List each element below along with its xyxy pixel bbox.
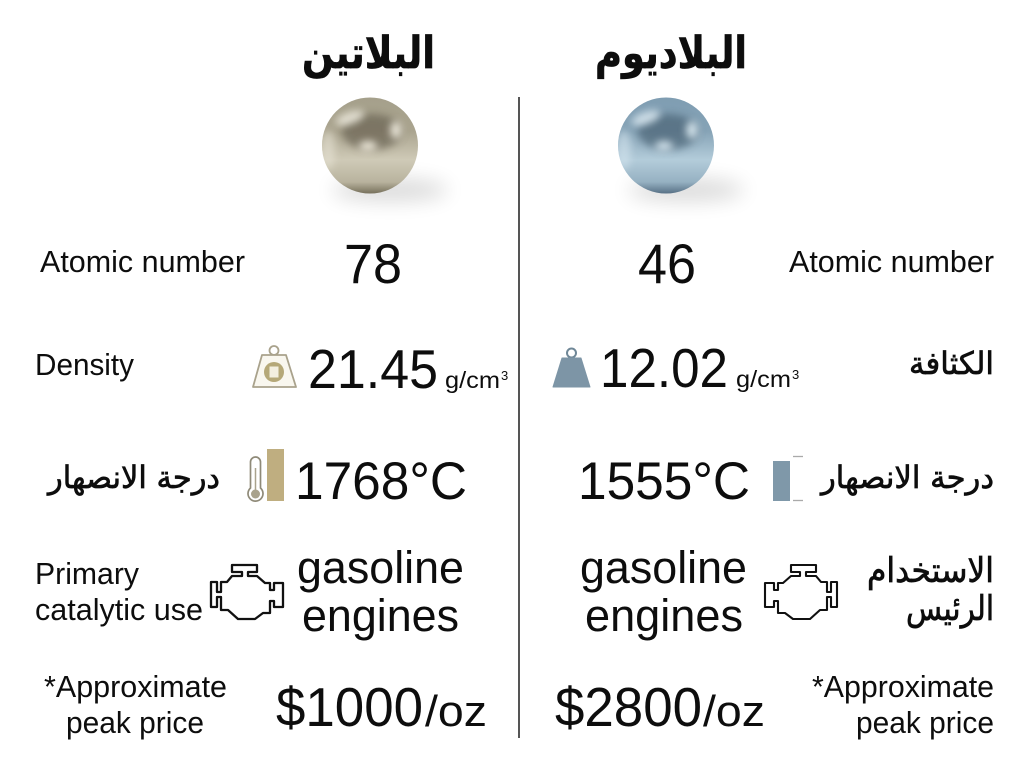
row: peak price, palladium: /oz	[703, 687, 765, 736]
row: atomic number, palladium: Atomic number	[789, 244, 994, 279]
row: peak price, palladium	[555, 669, 994, 740]
row: primary use, platinum	[35, 542, 464, 641]
row: primary use, platinum: gasoline	[297, 542, 464, 593]
row: atomic number, platinum: 78	[344, 232, 402, 295]
title: palladium: البلاديوم	[595, 28, 747, 79]
row: density, platinum: Density	[35, 347, 134, 382]
row: melting point, platinum: 1768°C	[295, 452, 467, 511]
row: density, palladium: 3	[792, 367, 799, 382]
icon: palladium weight	[553, 348, 590, 387]
palladium sphere	[617, 98, 744, 201]
row: density, palladium	[553, 337, 994, 399]
title: platinum: البلاتين	[302, 28, 435, 79]
row: atomic number, palladium: 46	[638, 232, 696, 295]
row: density, platinum: 21.45	[308, 338, 438, 400]
row: atomic number, platinum	[40, 232, 402, 295]
row: peak price, palladium: peak price	[856, 705, 994, 740]
row: density, palladium: الكثافة	[909, 346, 994, 382]
row: primary use, palladium: engines	[585, 590, 743, 641]
icon: engine	[211, 565, 283, 619]
row: atomic number, platinum: Atomic number	[40, 244, 245, 279]
row: melting point, palladium: 1555°C	[578, 452, 750, 511]
row: density, platinum: g/cm	[445, 367, 500, 393]
row: melting point, palladium	[578, 452, 994, 511]
row: peak price, palladium: *Approximate	[812, 669, 994, 704]
row: primary use, platinum: engines	[302, 590, 459, 641]
row: melting point, platinum	[46, 449, 467, 511]
row: melting point, platinum: درجة الانصهار	[46, 460, 220, 496]
icon: platinum weight	[253, 346, 296, 387]
row: density, platinum: 3	[501, 368, 508, 383]
row: peak price, platinum: $1000	[276, 676, 423, 738]
center divider line	[518, 97, 520, 738]
row: density, palladium: g/cm	[736, 366, 791, 392]
row: primary use, palladium: الاستخدام	[867, 551, 994, 591]
row: peak price, platinum: peak price	[66, 705, 204, 740]
platinum sphere	[321, 98, 448, 201]
row: peak price, platinum: *Approximate	[44, 669, 227, 704]
row: primary use, palladium	[580, 542, 994, 641]
row: primary use, platinum: Primary	[35, 556, 139, 591]
bar: palladium melting point	[773, 461, 790, 501]
row: primary use, platinum: catalytic use	[35, 592, 203, 627]
icon: thermometer	[248, 457, 263, 501]
row: peak price, platinum	[44, 669, 487, 740]
row: atomic number, palladium	[638, 232, 994, 295]
row: peak price, palladium: $2800	[555, 676, 702, 738]
bar: platinum melting point	[267, 449, 284, 501]
row: density, palladium: 12.02	[600, 337, 728, 399]
row: primary use, palladium: الرئيس	[906, 589, 994, 629]
icon: engine	[765, 565, 837, 619]
row: primary use, palladium: gasoline	[580, 542, 747, 593]
row: melting point, palladium: درجة الانصهار	[819, 460, 994, 496]
row: peak price, platinum: /oz	[425, 687, 487, 736]
row: density, platinum	[35, 338, 508, 400]
